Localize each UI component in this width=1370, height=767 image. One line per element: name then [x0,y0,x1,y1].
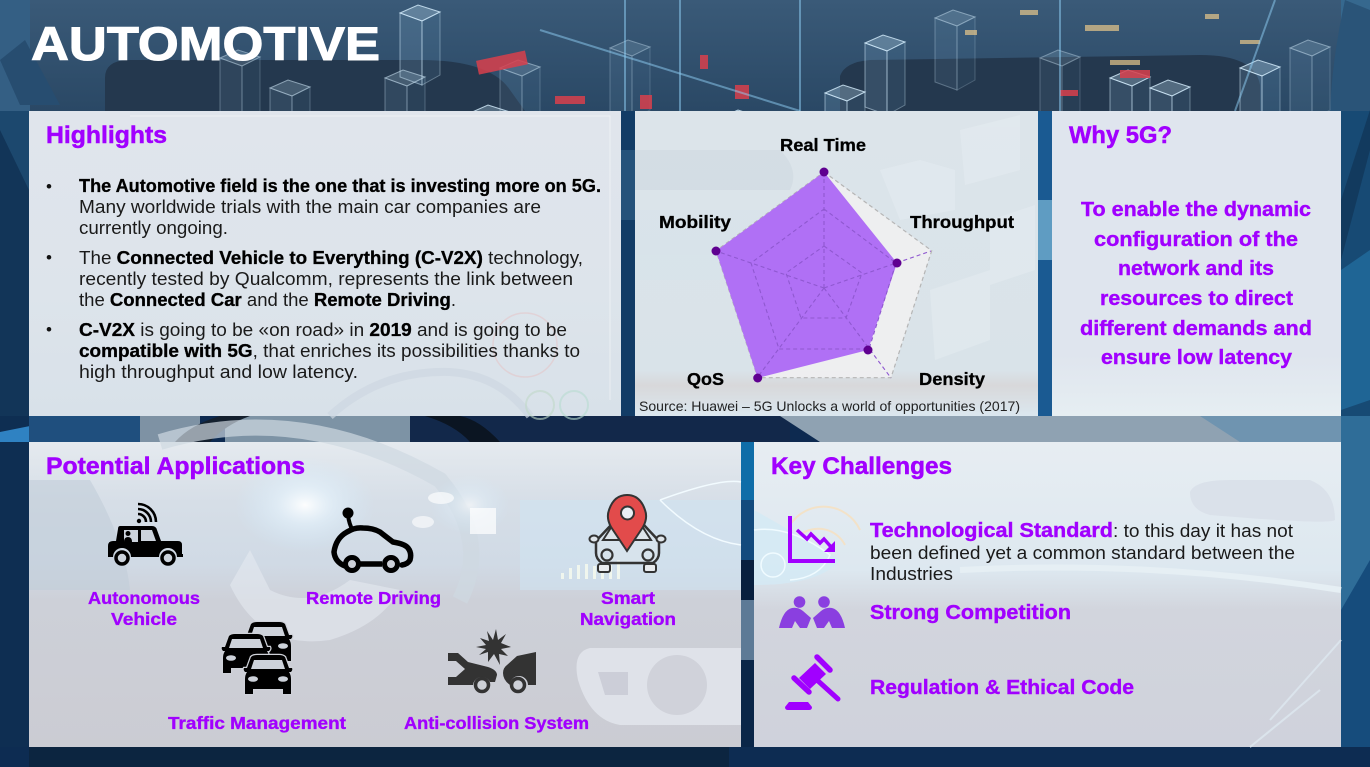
bullet list: C-V2X is going to be «on road» in 2019 and is going to be [79,320,567,340]
bullet list: currently ongoing. [79,218,228,238]
why 5G statement: ensure low latency [1101,346,1293,369]
icon: anti-collision [448,629,536,692]
icon: competition [779,596,845,628]
radar axis labels: Throughput [910,212,1014,232]
bullet list: Many worldwide trials with the main car companies are [79,197,541,217]
label: autonomous vehicle: Vehicle [111,609,177,629]
icon: smart navigation [590,495,666,572]
icon: gavel [785,657,838,710]
source note: Source: Huawei – 5G Unlocks a world of opportunities (2017) [639,398,1020,414]
faint interior detail [754,480,1341,747]
radar axis labels [659,135,1014,389]
bullet list: recently tested by Qualcomm, represents the link between [79,269,573,289]
why 5G statement: different demands and [1080,317,1312,340]
label: smart navigation: Navigation [580,609,676,629]
label: remote driving: Remote Driving [306,588,441,608]
bullet list: • [46,248,52,267]
challenge: regulation and ethical code: Regulation & Ethical Code [870,676,1134,699]
label: traffic management: Traffic Management [168,713,346,733]
why 5G statement [1080,198,1312,369]
radar data polygon [716,172,897,378]
label: smart navigation: Smart [601,588,655,608]
icon: declining chart [790,516,835,561]
faint cube detail [635,115,1035,360]
faint dashboard detail [130,116,610,419]
label: smart navigation [580,588,676,629]
bullet list: The Connected Vehicle to Everything (C-V2X) technology, [79,248,583,268]
challenge: technological standard: : to this day it has not [1113,521,1293,541]
heading: key challenges: Key Challenges [771,453,952,480]
panel: key challenges [754,442,1341,747]
why 5G statement: resources to direct [1100,287,1293,310]
label: anti-collision system: Anti-collision System [404,713,589,733]
bullet list: compatible with 5G , that enriches its possibilities thanks to [79,341,580,361]
challenge: technological standard [870,519,1295,584]
label: autonomous vehicle: Autonomous [88,588,200,608]
challenge: strong competition: Strong Competition [870,601,1071,624]
icon: traffic management [222,622,292,694]
challenge: technological standard: Technological Standard [870,519,1113,542]
why 5G statement: To enable the dynamic [1081,198,1311,221]
panel: radar chart [635,111,1038,416]
heading: why 5G: Why 5G? [1069,122,1172,149]
challenge: technological standard: Industries [870,564,953,584]
why 5G statement: configuration of the [1094,228,1298,251]
radar data points [712,168,902,382]
heading: potential applications: Potential Applications [46,453,305,480]
challenge: technological standard: been defined yet a common standard between the [870,543,1295,563]
radar grid [716,172,932,378]
panel: highlights [29,111,621,419]
radar axis labels: Real Time [780,135,866,155]
panel: potential applications [29,428,741,747]
radar axis labels: Mobility [659,212,731,232]
heading: highlights: Highlights [46,122,167,149]
icon: remote driving [334,508,411,570]
radar inner grid lines [716,172,931,378]
radar axis labels: QoS [687,369,724,389]
bullet list [46,176,601,382]
icon: autonomous vehicle [108,504,183,564]
why 5G statement: network and its [1118,257,1274,280]
bullet list: • [46,320,52,339]
faint interior detail [29,428,741,725]
bullet list: high throughput and low latency. [79,362,358,382]
radar axis labels: Density [919,369,985,389]
bullet list: the Connected Car and the Remote Driving. [79,290,456,310]
panel: why 5G [1052,111,1341,416]
bullet list: • [46,177,52,196]
bullet list: The Automotive field is the one that is investing more on 5G. [79,176,601,196]
label: autonomous vehicle [88,588,200,629]
title: AUTOMOTIVE [31,17,380,70]
